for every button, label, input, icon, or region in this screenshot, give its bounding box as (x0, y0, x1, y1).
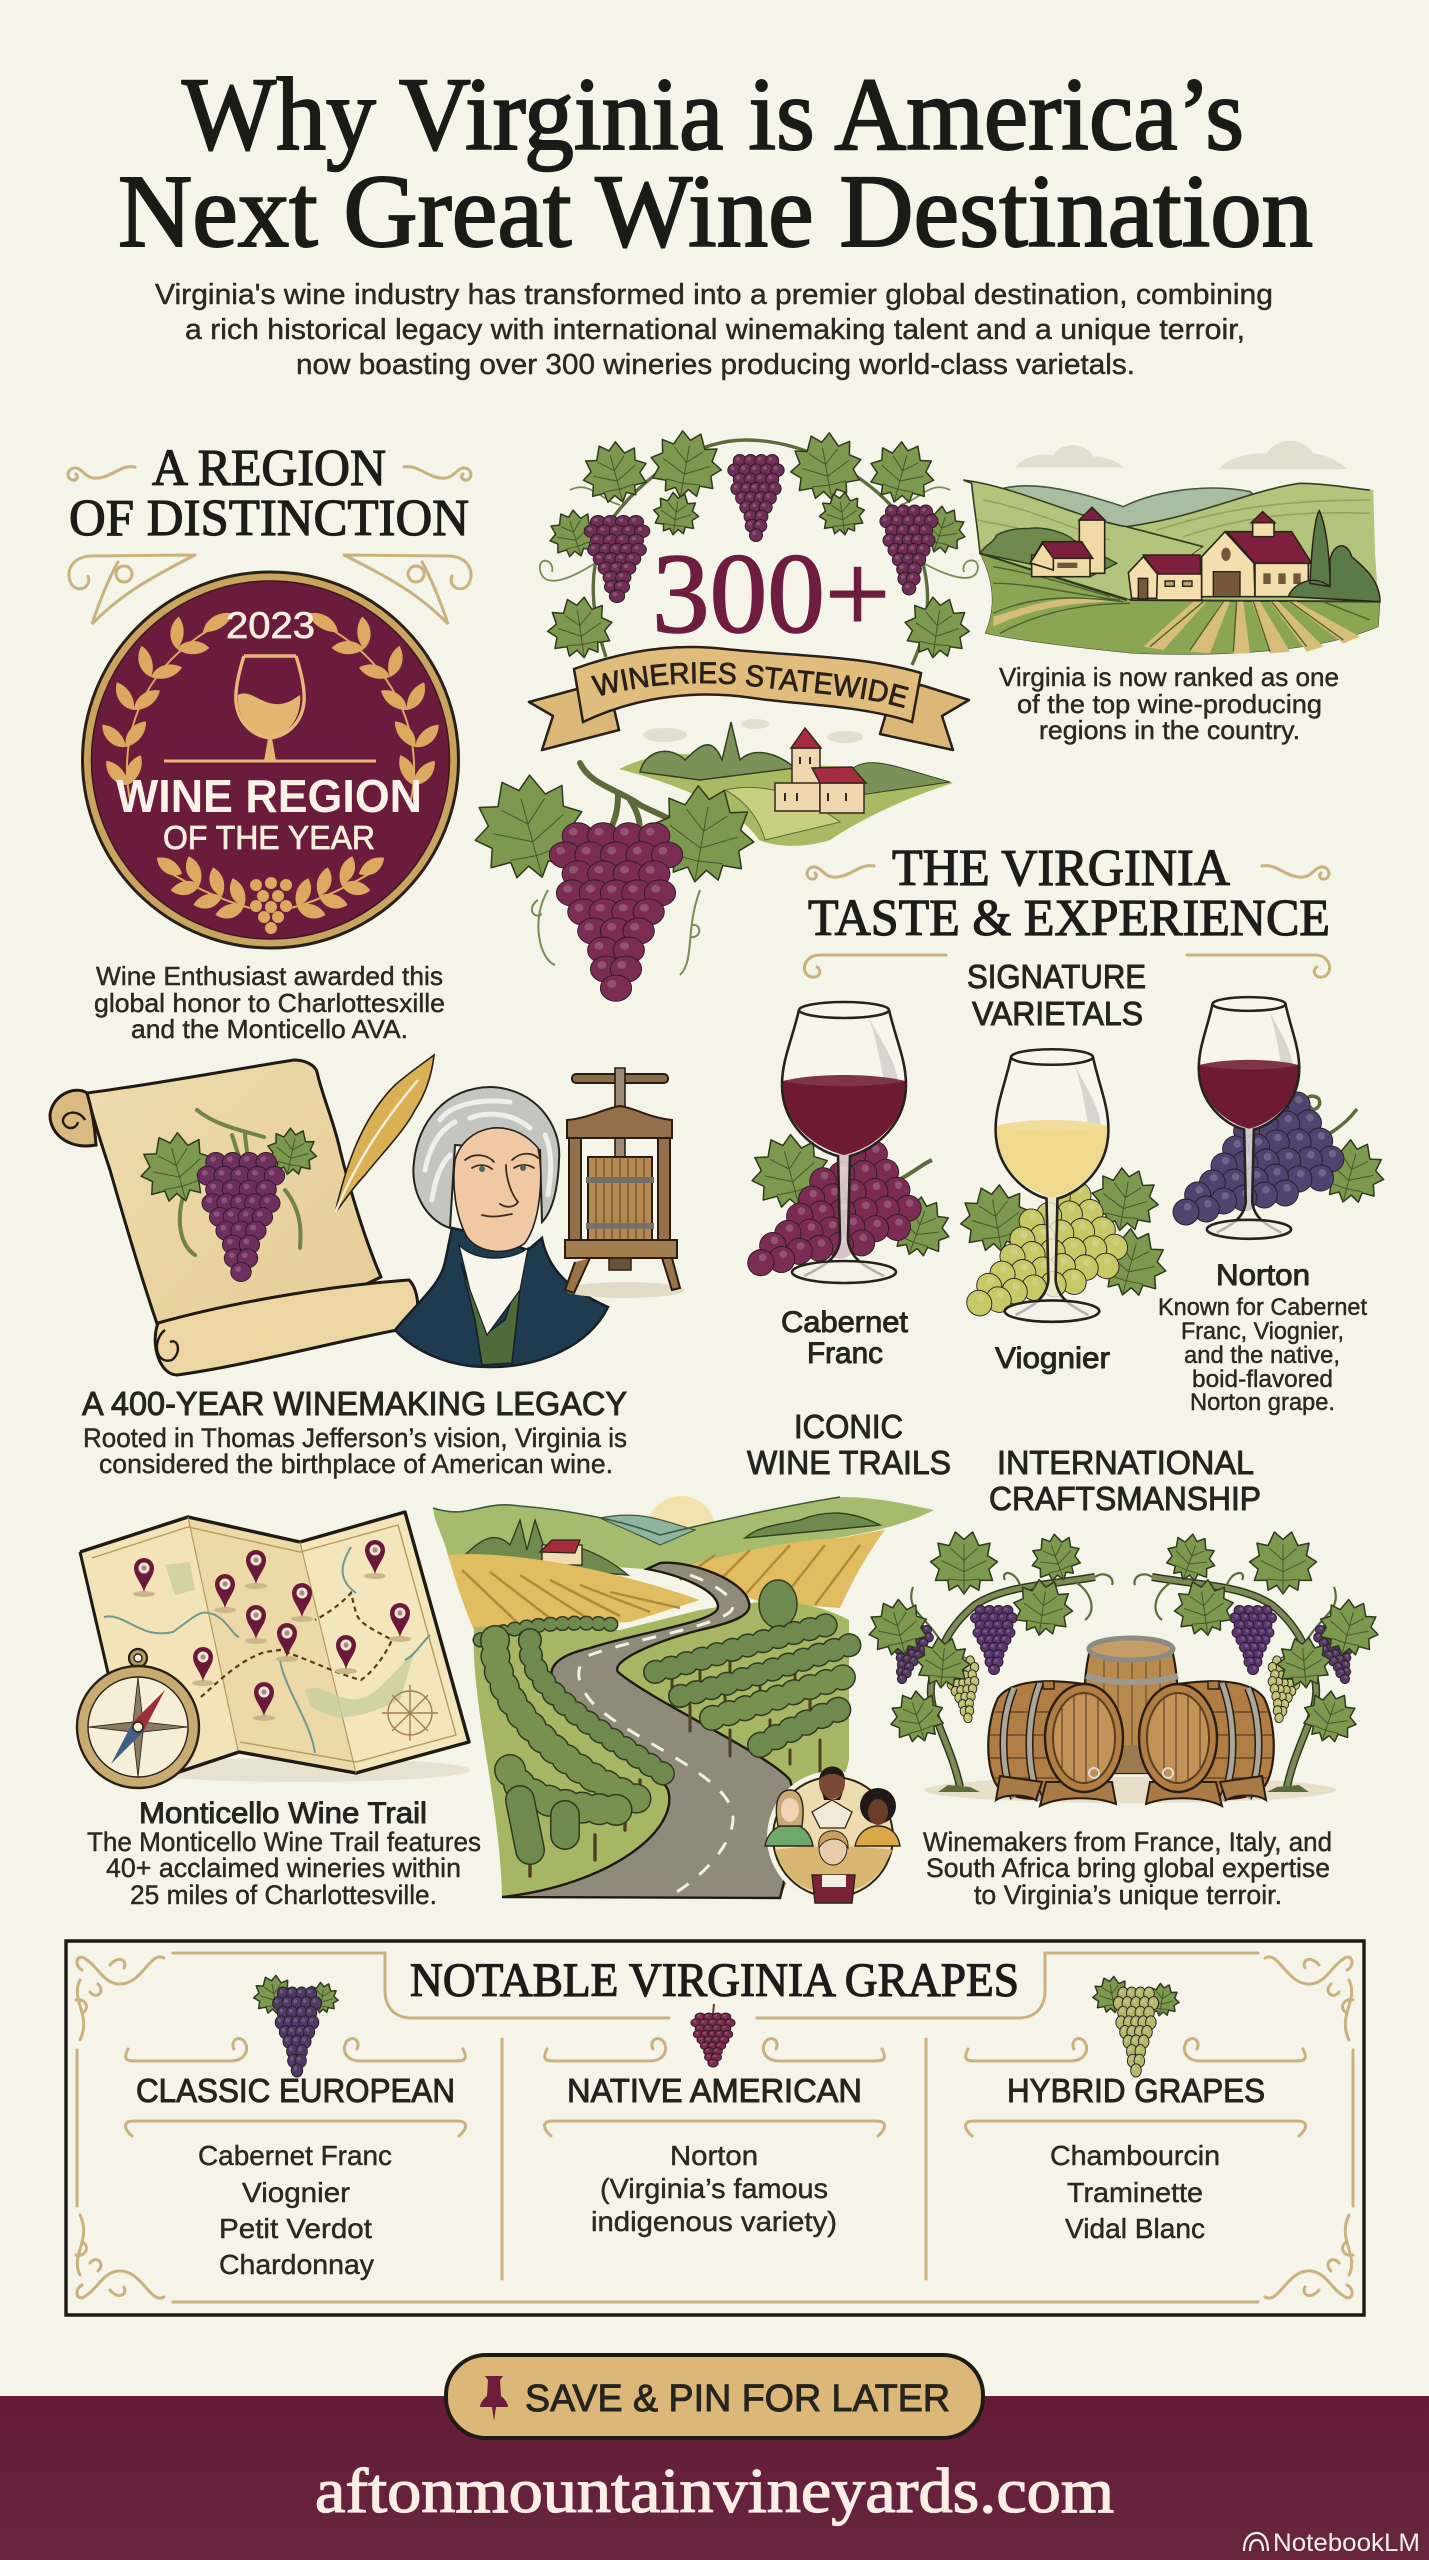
big grape bunch with leaves (463, 763, 762, 1001)
varietal: cabernet franc: Franc (807, 1337, 883, 1370)
icon: push pin (480, 2376, 508, 2421)
legacy heading and text (82, 1385, 627, 1479)
vine rows left (480, 1623, 665, 1876)
notebooklm mark: NotebookLM (1273, 2529, 1420, 2557)
intro text: Virginia's wine industry has transformed into a premier global destination, combining (155, 279, 1273, 311)
varietal: norton: Norton (1216, 1259, 1310, 1292)
intro text (155, 279, 1273, 381)
heading: the virginia taste and experience (804, 840, 1330, 977)
international craftsmanship heading: INTERNATIONAL (997, 1444, 1254, 1481)
badge small grapes (250, 877, 292, 934)
top left roll (50, 1090, 96, 1146)
farm scene (963, 441, 1380, 654)
column: hybrid grapes: Vidal Blanc (1065, 2213, 1205, 2244)
footer band (0, 2396, 1429, 2560)
title: Next Great Wine Destination (118, 154, 1313, 269)
left barrel (988, 1681, 1123, 1806)
vine rows right (655, 1622, 852, 1776)
winding road vineyard scene (433, 1496, 934, 1898)
farmhouse wing (1128, 555, 1202, 600)
column: native american: (Virginia’s famous (600, 2173, 828, 2204)
heading: the virginia taste and experience: THE VIRGINIA (892, 840, 1230, 897)
wine press (565, 1068, 685, 1298)
title: Why Virginia is America’s (182, 57, 1244, 172)
village on a hill (619, 719, 953, 846)
signature varietals heading (967, 958, 1146, 1032)
silo (1079, 507, 1105, 573)
right vine (1134, 1528, 1385, 1792)
badge: wine region of the year 2023: OF THE YEAR (163, 819, 375, 856)
monticello wine trail text: 40+ acclaimed wineries within (106, 1853, 461, 1883)
ribbon: WINERIES STATEWIDE (590, 662, 909, 708)
clouds (1015, 441, 1348, 469)
column: native american: Norton (670, 2140, 758, 2171)
save and pin button (446, 2355, 983, 2438)
badge: wine region of the year 2023: WINE REGION (116, 770, 422, 822)
column: native american (544, 2004, 884, 2237)
panel: notable virginia grapes (66, 1941, 1364, 2315)
field (980, 553, 1380, 654)
scroll with grape drawing (50, 1060, 418, 1375)
title (118, 57, 1313, 269)
varietal: norton: Known for Cabernet (1158, 1294, 1367, 1321)
column: classic european: Chardonnay (219, 2249, 374, 2280)
hills (1003, 486, 1283, 533)
column: classic european: Petit Verdot (219, 2213, 372, 2244)
award caption: and the Monticello AVA. (131, 1014, 408, 1044)
varietal: norton: and the native, (1184, 1342, 1340, 1369)
column: hybrid grapes (966, 1974, 1306, 2244)
monticello wine trail text: The Monticello Wine Trail features (87, 1827, 481, 1857)
iconic wine trails heading (747, 1408, 951, 1481)
column: classic european: Viognier (242, 2177, 350, 2208)
signature varietals heading: VARIETALS (972, 995, 1143, 1032)
legacy heading and text: A 400-YEAR WINEMAKING LEGACY (82, 1385, 627, 1422)
wreath grapes (584, 454, 938, 602)
save and pin button: SAVE & PIN FOR LATER (525, 2378, 950, 2420)
map (80, 1512, 470, 1782)
wreath leaves (543, 426, 973, 662)
award caption: global honor to Charlottesxille (94, 988, 445, 1018)
small house (1030, 542, 1093, 577)
person: bottom man (812, 1831, 855, 1903)
column: hybrid grapes: HYBRID GRAPES (1007, 2072, 1265, 2109)
right barrel (1139, 1681, 1274, 1806)
scroll grapes (133, 1110, 321, 1282)
varietal: norton: boid-flavored (1192, 1366, 1333, 1393)
badge glass icon (164, 656, 376, 761)
bushes (980, 528, 1117, 577)
trees (1288, 511, 1380, 602)
portrait: thomas jefferson (395, 1087, 608, 1367)
column: classic european: CLASSIC EUROPEAN (136, 2072, 455, 2109)
column: native american: NATIVE AMERICAN (567, 2072, 862, 2109)
varietal: norton: Franc, Viognier, (1181, 1318, 1344, 1345)
map terrain and rivers (104, 1547, 430, 1753)
column: hybrid grapes: Traminette (1067, 2177, 1203, 2208)
compass (77, 1649, 199, 1788)
monticello wine trail text: 25 miles of Charlottesville. (130, 1880, 437, 1910)
sun (646, 1496, 716, 1566)
column: classic european: Cabernet Franc (198, 2140, 392, 2171)
quill (335, 1055, 434, 1213)
craftsmanship caption (923, 1827, 1332, 1910)
farm caption: of the top wine-producing (1017, 689, 1322, 719)
international craftsmanship heading (989, 1444, 1261, 1517)
road (502, 1563, 794, 1898)
left vine (862, 1528, 1113, 1792)
column: native american: indigenous variety) (591, 2206, 837, 2237)
craftsmanship caption: Winemakers from France, Italy, and (923, 1827, 1332, 1857)
varietal: viognier: Viognier (995, 1342, 1110, 1375)
international craftsmanship heading: CRAFTSMANSHIP (989, 1480, 1261, 1517)
heading: a region of distinction (68, 440, 471, 624)
back hills (433, 1497, 934, 1570)
award caption (94, 961, 445, 1044)
varietal: cabernet franc: Cabernet (781, 1306, 909, 1339)
website url: aftonmountainvineyards.com (315, 2455, 1114, 2526)
monticello wine trail text (87, 1797, 481, 1910)
map compass rose (382, 1685, 438, 1741)
legacy heading and text: Rooted in Thomas Jefferson’s vision, Virginia is (83, 1423, 627, 1453)
heading: the virginia taste and experience: TASTE & EXPERIENCE (808, 890, 1330, 947)
scroll sheet (87, 1060, 381, 1375)
people circle (765, 1766, 900, 1903)
monticello wine trail text: Monticello Wine Trail (139, 1797, 427, 1830)
legacy heading and text: considered the birthplace of American wine. (99, 1449, 613, 1479)
panel frame ornaments (76, 1953, 1353, 2302)
heading: a region of distinction: OF DISTINCTION (69, 490, 469, 547)
green ground (474, 1602, 849, 1898)
golden fields (448, 1530, 885, 1630)
intro text: now boasting over 300 wineries producing world-class varietals. (296, 349, 1135, 381)
farm caption: Virginia is now ranked as one (999, 662, 1339, 692)
ribbon (528, 646, 970, 752)
award caption: Wine Enthusiast awarded this (96, 961, 443, 991)
craftsmanship caption: to Virginia’s unique terroir. (974, 1880, 1282, 1910)
upright barrel (1084, 1638, 1178, 1773)
craftsmanship caption: South Africa bring global expertise (926, 1853, 1330, 1883)
varietal: norton: Norton grape. (1190, 1389, 1335, 1416)
map pins (133, 1540, 411, 1721)
farm trees and house (465, 1520, 628, 1575)
signature varietals heading: SIGNATURE (967, 958, 1146, 995)
varietal: viognier (937, 1049, 1174, 1375)
farm caption: regions in the country. (1039, 715, 1300, 745)
varietal: cabernet franc (720, 1002, 958, 1370)
column: classic european (126, 1973, 466, 2280)
tree on hill (759, 1580, 797, 1640)
wreath: 300+ wineries (528, 430, 979, 752)
wreath: 300+ wineries: 300+ (652, 530, 890, 657)
vines and barrels (862, 1528, 1385, 1806)
varietal: norton (1146, 997, 1391, 1416)
farm caption (999, 662, 1339, 745)
badge laurel (97, 608, 444, 922)
vine arch (593, 440, 928, 665)
wreath tendrils (540, 487, 978, 581)
badge: wine region of the year 2023: 2023 (226, 605, 315, 646)
person: top man (812, 1766, 852, 1828)
heading: a region of distinction: A REGION (152, 440, 386, 497)
intro text: a rich historical legacy with international winemaking talent and a unique terroir, (185, 314, 1245, 346)
person: left woman (765, 1790, 813, 1846)
person: right woman (855, 1788, 900, 1846)
column: hybrid grapes: Chambourcin (1050, 2140, 1220, 2171)
badge: wine region of the year 2023 (82, 572, 458, 948)
panel: notable virginia grapes: NOTABLE VIRGINIA GRAPES (410, 1954, 1019, 2007)
iconic wine trails heading: WINE TRAILS (747, 1444, 951, 1481)
barn (1202, 512, 1312, 597)
bottom roll (155, 1280, 418, 1375)
iconic wine trails heading: ICONIC (794, 1408, 903, 1445)
